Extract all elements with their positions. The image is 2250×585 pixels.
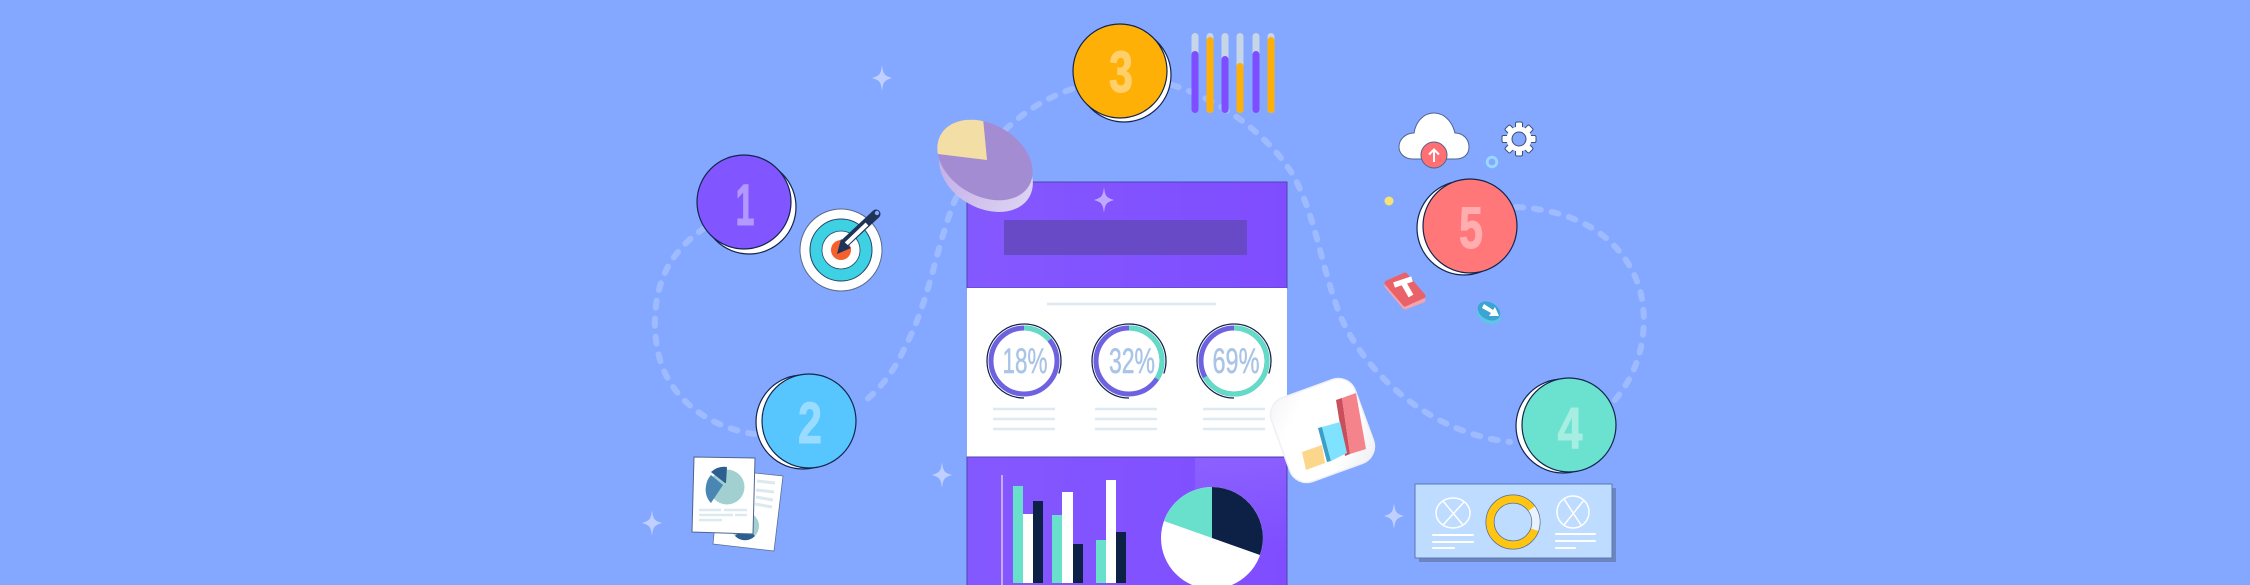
front sheet	[692, 457, 755, 534]
card lower band	[967, 457, 1287, 585]
icon: gear	[1502, 122, 1536, 156]
icon: target with dart	[800, 209, 882, 291]
caption lines	[993, 409, 1265, 429]
step 5 badge	[1417, 179, 1517, 275]
centre yellow donut	[1481, 490, 1545, 554]
header title bar	[1004, 220, 1247, 255]
step 1 badge	[697, 155, 796, 254]
bar chart	[1002, 475, 1126, 585]
donut 18%: 18%	[1002, 342, 1048, 381]
step 1 badge: 1	[736, 173, 754, 238]
decorative dot	[1384, 196, 1394, 206]
step 4 badge: 4	[1558, 396, 1582, 461]
donut 18%	[987, 324, 1061, 398]
step 2 badge	[756, 374, 856, 469]
decorative ring	[1487, 157, 1497, 167]
icon: 3D pie	[937, 120, 1033, 212]
icon: report documents	[692, 457, 783, 551]
donut 69%	[1197, 324, 1271, 398]
donut 32%	[1092, 324, 1166, 398]
panel caption lines	[1433, 534, 1595, 548]
step 2 badge: 2	[798, 391, 822, 456]
icon: cloud upload	[1399, 113, 1469, 168]
donut 32%: 32%	[1109, 342, 1155, 381]
step 5 badge: 5	[1459, 196, 1483, 261]
step 3 badge	[1073, 24, 1171, 122]
icon: T tile	[1387, 275, 1423, 307]
sparkle stars	[642, 65, 1404, 536]
panel: dashboard mini card	[1415, 484, 1616, 562]
card white body	[967, 288, 1287, 457]
icon: 3D bar chart tile	[1265, 373, 1380, 488]
step 4 badge	[1516, 378, 1616, 473]
left outline pie	[1436, 498, 1470, 528]
donut 69%: 69%	[1212, 342, 1260, 381]
card header band	[967, 182, 1287, 288]
body heading line	[1047, 303, 1216, 305]
header sparkle	[1094, 187, 1114, 213]
icon: arrow coin	[1473, 298, 1505, 328]
panel: central report card	[967, 182, 1287, 585]
icon: vertical slider bars	[1192, 33, 1274, 113]
right outline pie	[1557, 496, 1589, 528]
dashed connector paths	[655, 85, 1644, 442]
pie chart	[1161, 487, 1263, 585]
back sheet	[713, 470, 783, 551]
step 3 badge: 3	[1109, 40, 1133, 105]
